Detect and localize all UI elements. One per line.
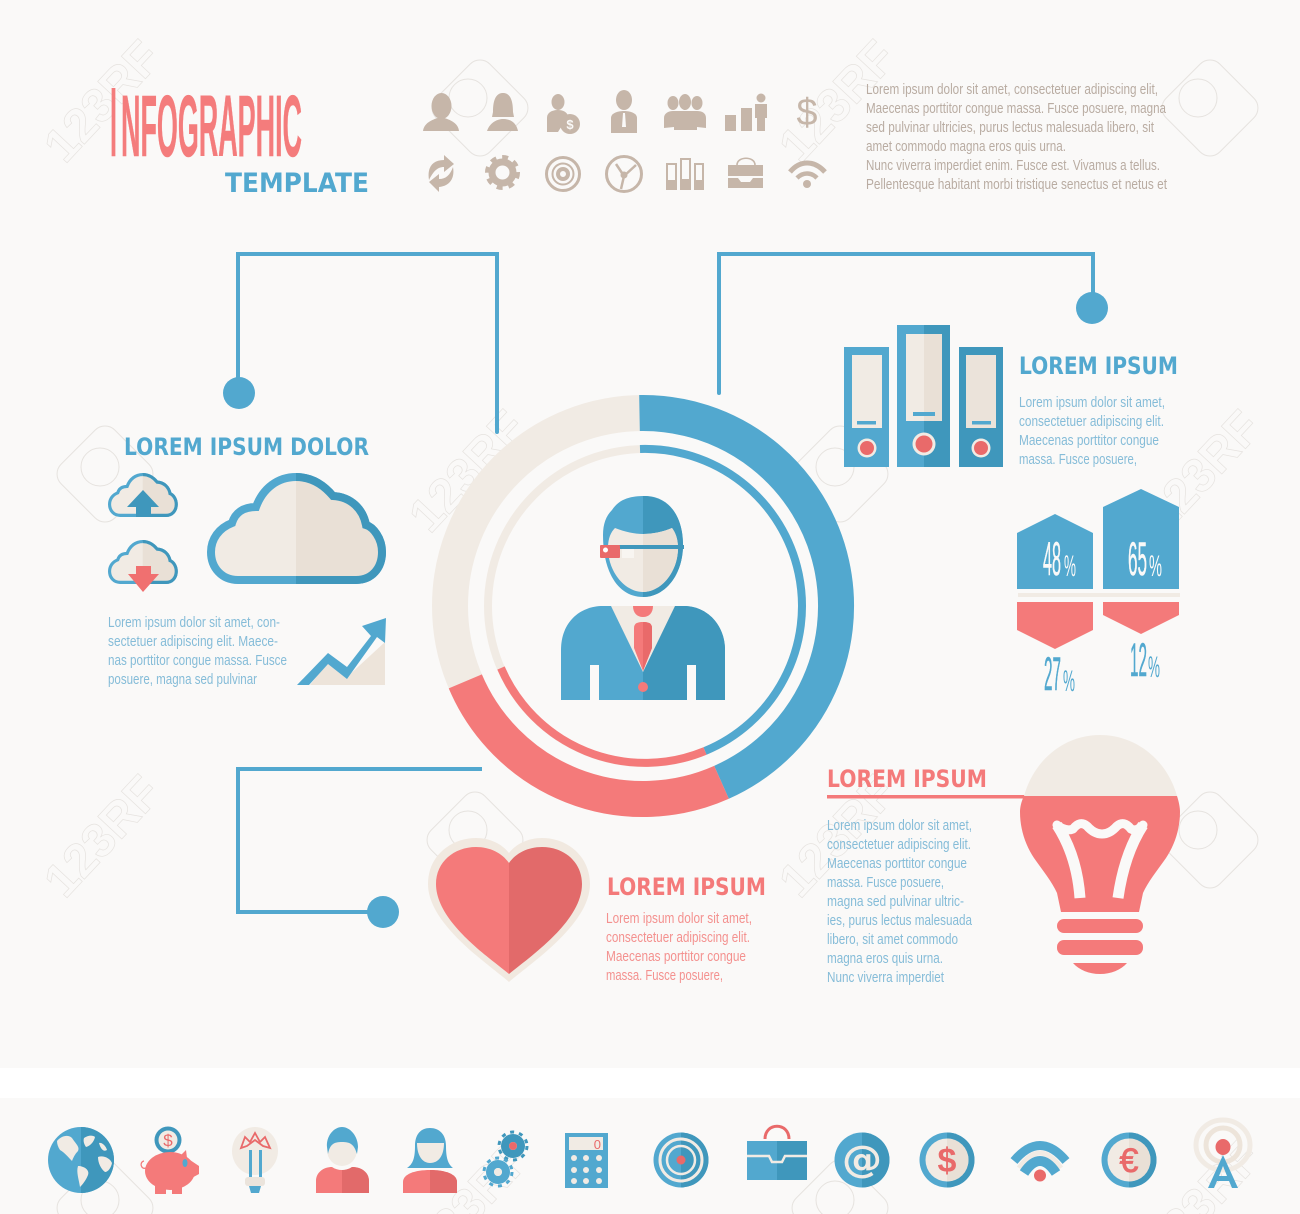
icon: euro coin bbox=[1102, 1132, 1156, 1188]
text block: Maecenas porttitor congue bbox=[827, 856, 967, 872]
intro text: Lorem ipsum dolor sit amet, consectetuer adipiscing elit, bbox=[866, 82, 1158, 98]
icon: large cloud bbox=[211, 477, 382, 580]
icon: globe bbox=[48, 1127, 114, 1193]
heading: LOREM IPSUM DOLOR bbox=[124, 433, 369, 461]
text block: consectetuer adipiscing elit. bbox=[606, 930, 750, 946]
intro text: Maecenas porttitor congue massa. Fusce posuere, magna bbox=[866, 101, 1167, 117]
icon: binders bbox=[844, 325, 1003, 467]
connector: top right bbox=[719, 254, 1108, 393]
text: NFOGRAPHIC bbox=[121, 78, 302, 175]
icon: target bbox=[654, 1132, 708, 1188]
bar 65%: % bbox=[1149, 550, 1162, 583]
text block: massa. Fusce posuere, bbox=[606, 968, 723, 984]
text block: sectetuer adipiscing elit. Maece- bbox=[108, 634, 278, 650]
text block bbox=[606, 911, 752, 984]
icon: team bbox=[664, 94, 706, 130]
text block: Nunc viverra imperdiet bbox=[827, 970, 944, 986]
text block: Maecenas porttitor congue bbox=[1019, 433, 1159, 449]
watermarks: 123RF bbox=[399, 401, 536, 543]
panel: light bulb bbox=[827, 735, 1180, 986]
icon: dollar: $ bbox=[796, 92, 818, 134]
icon: businessman with coin: $ bbox=[566, 117, 574, 132]
icon: businessman with coin bbox=[547, 94, 580, 134]
icon: refresh bbox=[429, 155, 454, 192]
text block bbox=[827, 818, 973, 986]
chart: percentage hexagons bbox=[1017, 489, 1180, 700]
icon: binders bbox=[666, 158, 704, 190]
text block: Lorem ipsum dolor sit amet, bbox=[1019, 395, 1165, 411]
text block: magna sed pulvinar ultric- bbox=[827, 894, 964, 910]
bottom icon row bbox=[48, 1120, 1250, 1194]
icon: chart and man bbox=[725, 94, 767, 131]
icon: wheel bbox=[606, 156, 642, 192]
heading: LOREM IPSUM bbox=[827, 765, 987, 793]
heading: LOREM IPSUM bbox=[1019, 352, 1178, 380]
icon: at sign: @ bbox=[842, 1138, 882, 1181]
icon: target bbox=[546, 158, 580, 190]
watermarks: 123RF bbox=[34, 31, 171, 173]
panel: heart bbox=[428, 838, 766, 984]
text block: consectetuer adipiscing elit. bbox=[1019, 414, 1164, 430]
watermarks: 123RF bbox=[34, 766, 171, 908]
bar 27%: % bbox=[1063, 665, 1075, 698]
bar 27% bbox=[1017, 602, 1093, 700]
icon: wifi bbox=[790, 163, 825, 188]
bar 27%: 27 bbox=[1044, 647, 1061, 700]
text block bbox=[108, 615, 287, 688]
icon: light bulb bbox=[1020, 735, 1180, 974]
watermarks: 123RF bbox=[769, 766, 906, 908]
icon: antenna tower bbox=[1196, 1120, 1250, 1188]
text block bbox=[1019, 395, 1165, 468]
text block: libero, sit amet commodo bbox=[827, 932, 958, 948]
intro text: Nunc viverra imperdiet enim. Fusce est. Vivamus a tellus. bbox=[866, 158, 1160, 174]
icon: gears bbox=[484, 1132, 527, 1186]
bar 12%: 12 bbox=[1130, 633, 1147, 686]
icon: briefcase bbox=[747, 1126, 807, 1180]
text block: posuere, magna sed pulvinar bbox=[108, 672, 257, 688]
person with smart glasses bbox=[561, 496, 725, 700]
icon: piggy bank: $ bbox=[163, 1131, 173, 1150]
subtitle: TEMPLATE bbox=[225, 168, 369, 199]
intro text: Pellentesque habitant morbi tristique senectus et netus et bbox=[866, 177, 1167, 193]
intro text bbox=[866, 82, 1167, 193]
bar 12% bbox=[1103, 602, 1179, 686]
icon: calculator bbox=[565, 1133, 608, 1188]
text block: nas porttitor congue massa. Fusce bbox=[108, 653, 287, 669]
bar 65% bbox=[1103, 489, 1179, 589]
donut chart bbox=[450, 413, 836, 799]
icon: euro coin: € bbox=[1120, 1142, 1139, 1180]
text block: Lorem ipsum dolor sit amet, bbox=[606, 911, 752, 927]
heading: LOREM IPSUM bbox=[607, 873, 766, 901]
panel: binders bbox=[844, 325, 1178, 468]
panel: cloud bbox=[108, 433, 386, 688]
title: I bbox=[110, 67, 117, 177]
connector: top left bbox=[223, 254, 497, 432]
text block: massa. Fusce posuere, bbox=[827, 875, 944, 891]
icon: heart bbox=[428, 838, 590, 982]
icon: idea bulb bbox=[232, 1127, 278, 1193]
watermarks: 123RF bbox=[769, 31, 906, 173]
icon: upload cloud bbox=[110, 475, 176, 517]
bar 48% bbox=[1017, 514, 1093, 589]
icon: briefcase bbox=[728, 158, 763, 188]
top icon set bbox=[423, 90, 825, 192]
icon: businessman bbox=[611, 90, 637, 133]
text block: Maecenas porttitor congue bbox=[606, 949, 746, 965]
bar 12%: % bbox=[1148, 651, 1160, 684]
icon: dollar coin bbox=[920, 1132, 974, 1188]
icon: woman silhouette bbox=[487, 93, 518, 131]
bar 65%: 65 bbox=[1128, 532, 1147, 585]
intro text: amet commodo magna eros quis urna. bbox=[866, 139, 1066, 155]
icon: calculator: 0 bbox=[594, 1137, 601, 1152]
icon: wifi bbox=[1014, 1146, 1066, 1182]
icon: man silhouette bbox=[423, 93, 459, 131]
text block: Lorem ipsum dolor sit amet, bbox=[827, 818, 972, 834]
icon: man bbox=[316, 1127, 369, 1193]
icon: growth chart bbox=[297, 618, 386, 685]
icon: woman bbox=[403, 1128, 457, 1193]
bar 48%: % bbox=[1064, 550, 1076, 583]
icon: at sign bbox=[834, 1132, 890, 1188]
watermarks: 123RF bbox=[1134, 401, 1271, 543]
text block: ies, purus lectus malesuada bbox=[827, 913, 973, 929]
icon: piggy bank bbox=[141, 1126, 199, 1194]
text block: magna eros quis urna. bbox=[827, 951, 943, 967]
intro text: sed pulvinar ultricies, purus lectus malesuada libero, sit bbox=[866, 120, 1154, 136]
icon: gear bbox=[487, 157, 518, 188]
bar 48%: 48 bbox=[1043, 532, 1061, 585]
connector: bottom left bbox=[238, 769, 482, 928]
icon: dollar coin: $ bbox=[938, 1142, 957, 1180]
text block: Lorem ipsum dolor sit amet, con- bbox=[108, 615, 280, 631]
icon: download cloud bbox=[110, 542, 176, 592]
title bbox=[110, 67, 302, 177]
text block: massa. Fusce posuere, bbox=[1019, 452, 1137, 468]
text block: consectetuer adipiscing elit. bbox=[827, 837, 971, 853]
